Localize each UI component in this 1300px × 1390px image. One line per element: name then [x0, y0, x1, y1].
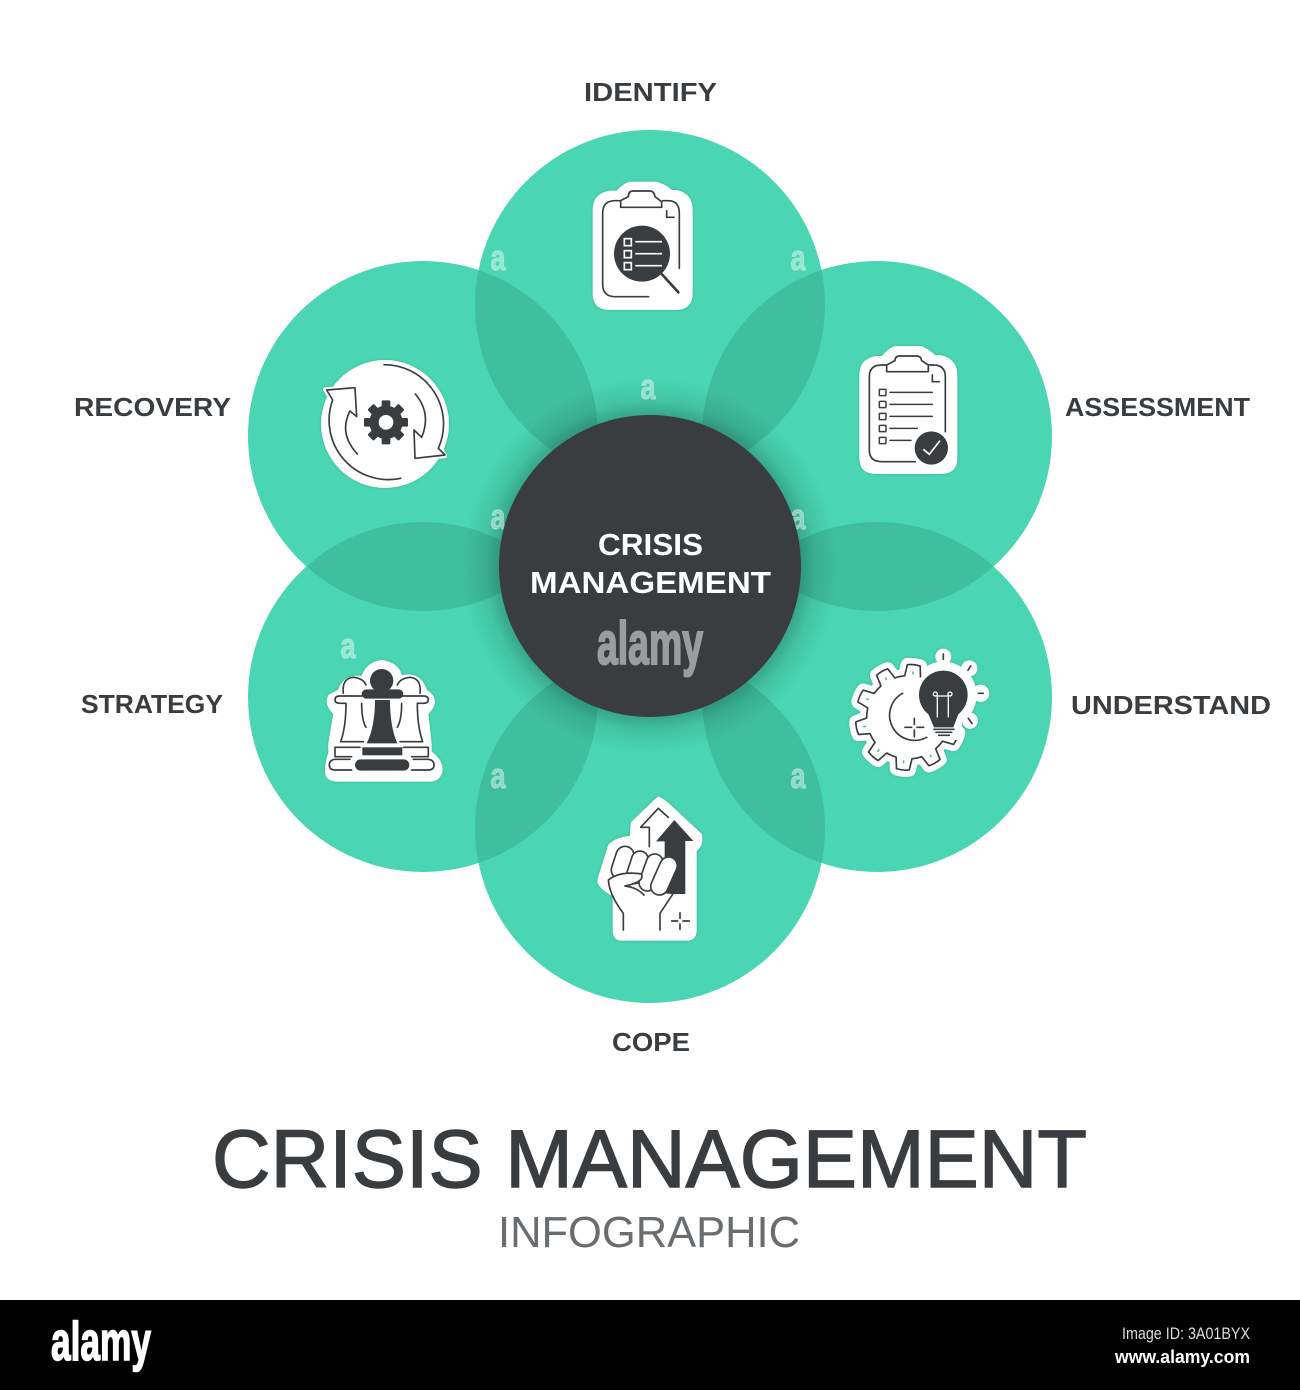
watermark letters: a [490, 496, 506, 537]
watermark letters [340, 237, 806, 796]
label: understand: UNDERSTAND [1071, 690, 1271, 720]
label: strategy: STRATEGY [81, 689, 223, 719]
petal: understand [702, 522, 1052, 872]
petal: recovery [248, 261, 598, 611]
footer logo: alamy [51, 1310, 151, 1372]
subtitle: INFOGRAPHIC [498, 1208, 800, 1257]
title: CRISIS MANAGEMENT [212, 1114, 1087, 1205]
icon: cope fist and arrows [599, 799, 700, 939]
petal: cope [475, 653, 825, 1003]
center circle [499, 415, 801, 717]
petal overlaps [306, 226, 994, 910]
footer bar [0, 1300, 1300, 1390]
center label: CRISIS [598, 527, 703, 562]
petal: identify [475, 130, 825, 480]
watermark letters: a [790, 237, 806, 278]
label: cope: COPE [612, 1027, 690, 1057]
watermark letters: a [340, 625, 356, 666]
petal: assessment [702, 261, 1052, 611]
center circle: MANAGEMENT [530, 565, 771, 600]
petal: strategy [248, 522, 598, 872]
petals [248, 130, 1052, 1003]
watermark letters: a [490, 237, 506, 278]
center watermark: alamy [597, 610, 703, 677]
label: identify: IDENTIFY [584, 77, 717, 107]
center glow [462, 378, 838, 754]
label: assessment: ASSESSMENT [1065, 392, 1250, 422]
watermark letters: a [490, 755, 506, 796]
icon: strategy chess pawns [327, 662, 441, 780]
footer url: www.alamy.com [1114, 1347, 1250, 1367]
watermark letters: a [790, 755, 806, 796]
label: recovery: RECOVERY [74, 392, 231, 422]
icon: assessment checklist [859, 346, 957, 474]
icon: identify clipboard with magnifier [593, 182, 693, 310]
icon: recovery cycle and gear [321, 360, 449, 488]
watermark letters: a [790, 496, 806, 537]
watermark letters: a [640, 366, 656, 407]
icon: understand gear and bulb [854, 649, 989, 771]
image id: Image ID: 3A01BYX [1122, 1324, 1250, 1343]
